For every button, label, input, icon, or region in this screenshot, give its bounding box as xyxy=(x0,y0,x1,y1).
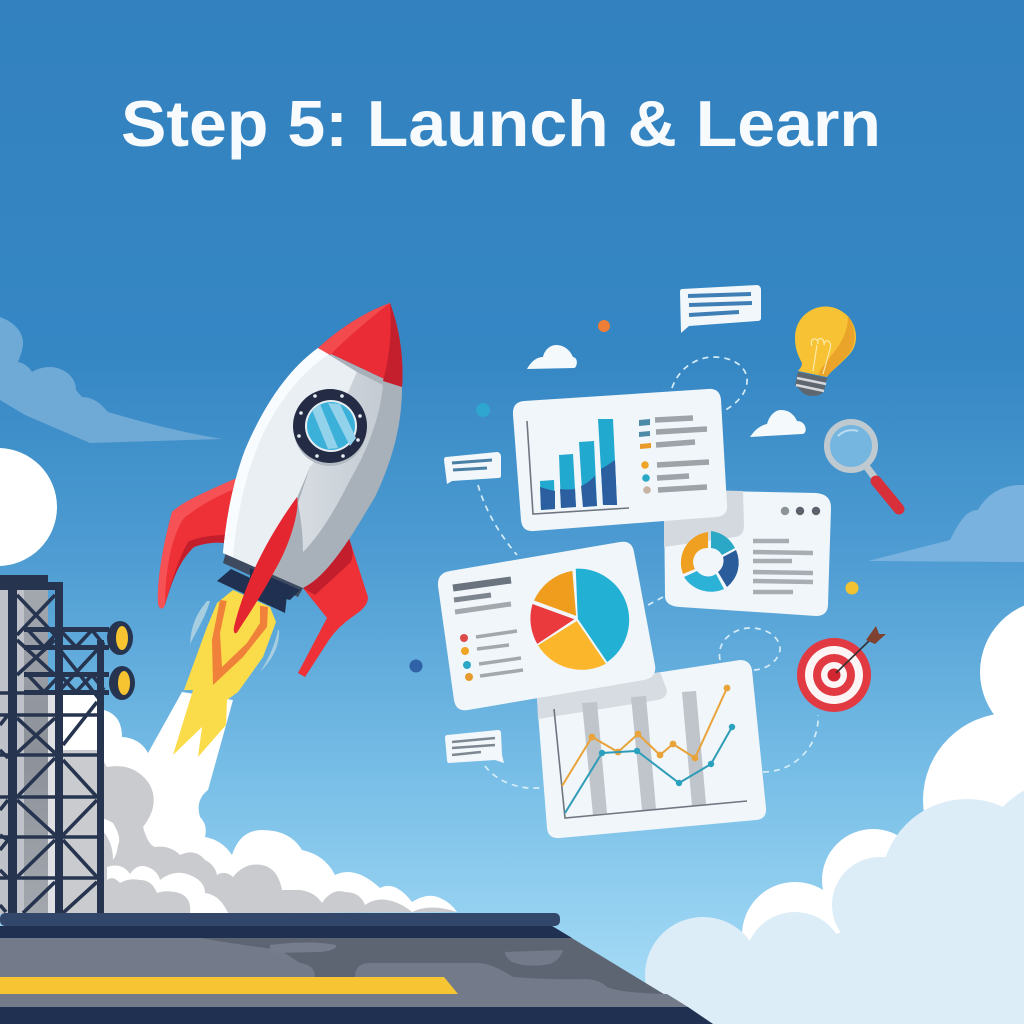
speech bubble: left xyxy=(444,452,501,484)
rocket engine nozzle xyxy=(217,552,303,613)
speech bubble: bottom xyxy=(445,730,504,763)
runway stripe xyxy=(0,977,458,994)
window dots xyxy=(781,507,820,515)
floodlight: lower xyxy=(109,666,135,700)
grey smoke shading xyxy=(100,755,457,914)
white dome smoke behind tower xyxy=(0,448,57,566)
launch tower xyxy=(0,575,135,914)
right fin xyxy=(298,535,368,677)
axes xyxy=(554,709,747,818)
faint cloud: right xyxy=(868,485,1024,562)
panel: bar chart card xyxy=(513,389,727,531)
gray columns xyxy=(582,691,706,815)
teal line series xyxy=(565,724,735,813)
text lines xyxy=(753,541,813,592)
exhaust flame xyxy=(173,590,279,757)
panel: line chart card xyxy=(537,660,766,838)
dots xyxy=(410,320,858,672)
pie chart xyxy=(530,568,630,671)
tower concrete core xyxy=(0,580,24,914)
chart legend xyxy=(639,418,709,494)
speech bubble: top xyxy=(680,285,761,333)
launch pad xyxy=(0,913,713,1024)
white inner lobes xyxy=(80,817,228,913)
small clouds xyxy=(527,345,806,437)
exhaust smoke cloud xyxy=(60,692,457,914)
dashed connectors xyxy=(478,357,818,788)
pie legend xyxy=(460,631,523,681)
rocket nose cone xyxy=(318,303,402,387)
icon: light bulb xyxy=(795,306,856,396)
centre fin xyxy=(234,497,298,633)
faint cloud: upper left xyxy=(0,317,222,443)
tower steel frame xyxy=(0,595,104,913)
card heading lines xyxy=(453,580,511,612)
bar chart xyxy=(527,419,629,514)
icon: target with arrow xyxy=(797,626,886,712)
floodlight: upper xyxy=(107,621,133,655)
rocket xyxy=(158,303,402,757)
panel: donut chart card xyxy=(664,490,831,616)
icon: magnifying glass xyxy=(827,422,899,509)
donut chart xyxy=(681,531,739,592)
orange line series xyxy=(562,685,730,786)
left fin xyxy=(158,478,237,609)
porthole window xyxy=(293,389,367,466)
title: Step 5: Launch & Learn xyxy=(121,87,881,160)
foreground clouds: right xyxy=(645,600,1024,1024)
rocket body xyxy=(223,348,402,588)
panel: pie chart card xyxy=(438,542,655,710)
